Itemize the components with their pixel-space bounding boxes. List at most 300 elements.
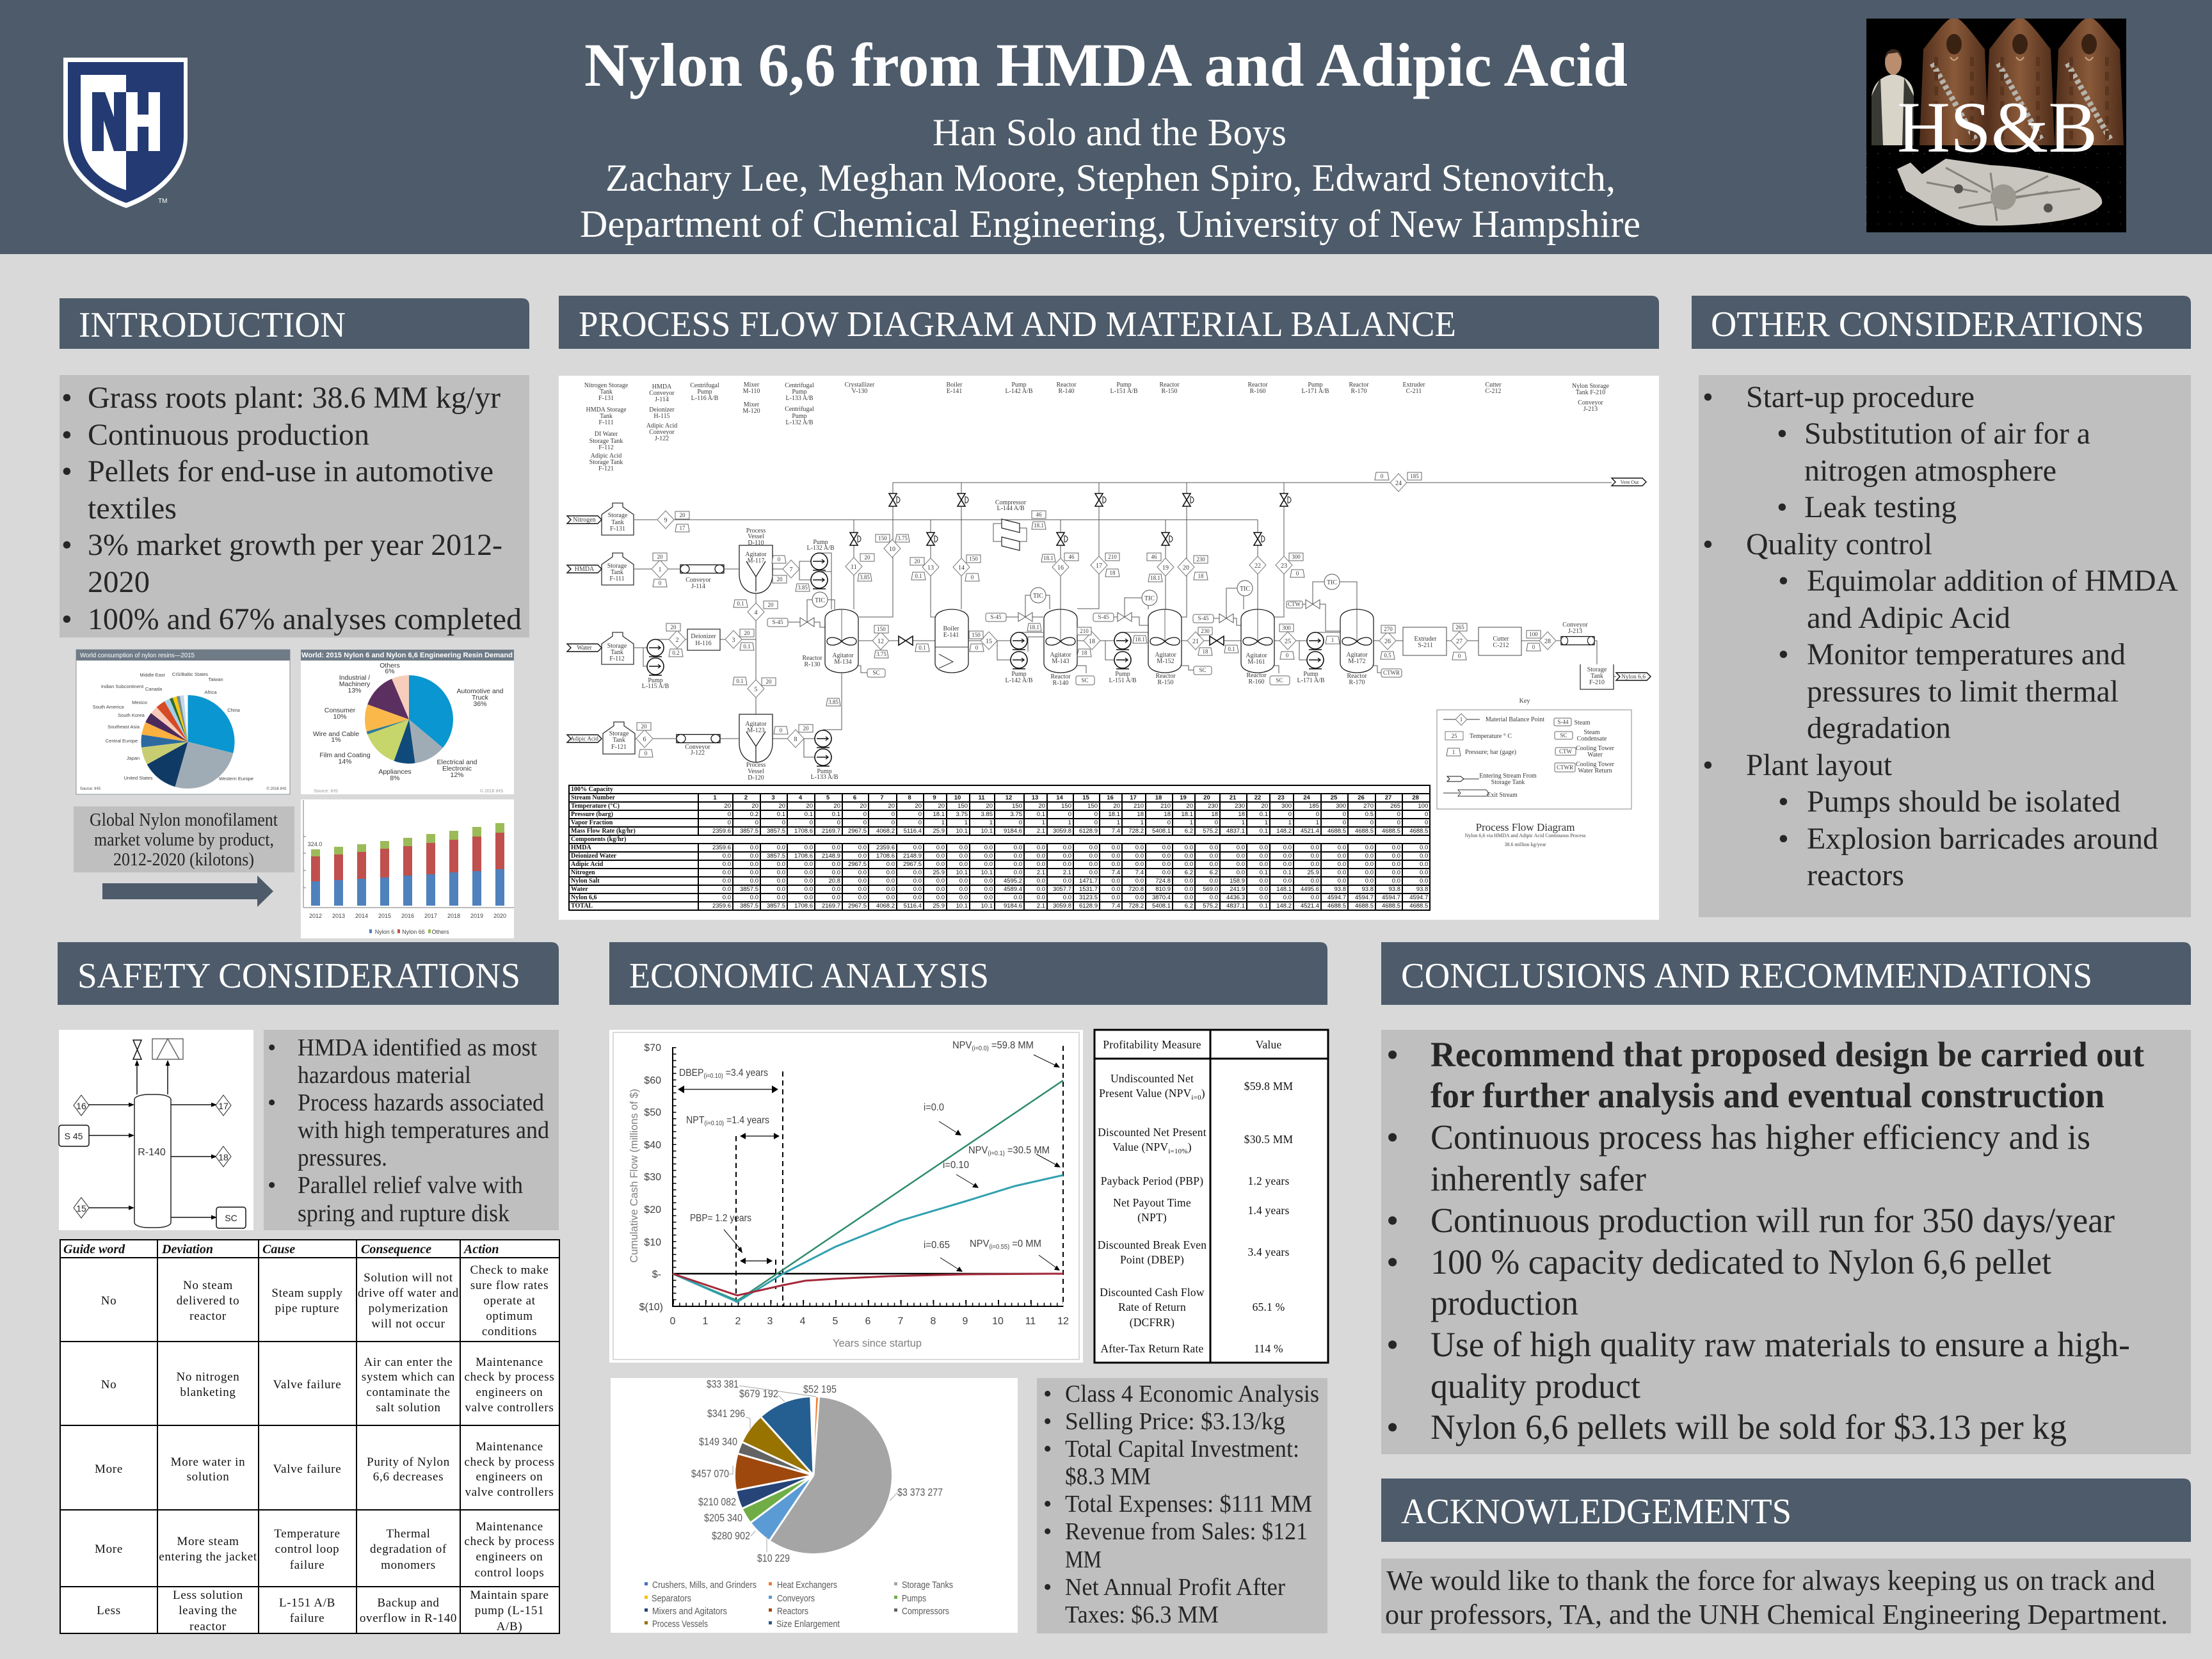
table: material balance stream table: 0.0 — [1135, 894, 1144, 901]
panel: other considerations bullets: Monitor temperatures and — [1807, 637, 2126, 671]
table: material balance stream table: 0.0 — [1283, 844, 1292, 851]
table: material balance stream table: 0.1 — [1283, 869, 1292, 876]
table: material balance stream table: 0.0 — [1135, 878, 1144, 885]
table: material balance stream table: 4595.2 — [1004, 878, 1022, 885]
storage tanks and inlets: Storage — [607, 563, 627, 570]
table: material balance stream table: 0.1 — [1260, 869, 1268, 876]
table: material balance stream table: 12 — [1006, 794, 1012, 801]
table: material balance stream table: 8 — [908, 794, 911, 801]
equipment labels: Conveyor — [649, 429, 675, 436]
table: material balance stream table: 0.0 — [1037, 894, 1045, 901]
arrow: to bar chart — [102, 876, 273, 907]
material balance diamonds: 13 — [927, 565, 934, 572]
table: material balance stream table: 10.1 — [981, 828, 993, 835]
panel: conclusions bullets: quality product — [1431, 1366, 1640, 1406]
chart: equipment cost pie: $10 229 — [757, 1552, 790, 1564]
table: material balance stream table: 0 — [892, 811, 895, 818]
diagram caption — [1464, 821, 1586, 847]
table: material balance stream table: 0.0 — [805, 878, 813, 885]
conveyors, deionizer, extruder and cutter: Conveyor — [1562, 621, 1588, 629]
team name: Han Solo and the Boys — [933, 111, 1286, 154]
panel: conclusions bullets: 100 % capacity dedicated to Nylon 6,6 pellet — [1431, 1242, 2051, 1281]
table: material balance stream table: 6128.9 — [1079, 828, 1098, 835]
table: material balance stream table: 0 — [1425, 819, 1428, 826]
process vessels and reactors: M-152 — [1157, 658, 1174, 665]
table: material balance stream table: 2.1 — [1037, 828, 1045, 835]
table: material balance stream table: 1708.6 — [876, 853, 895, 860]
table: material balance stream table: 0.0 — [1185, 886, 1193, 893]
key: Exit Stream — [1487, 792, 1518, 799]
table: material balance stream table: 0 — [1019, 819, 1022, 826]
equipment labels — [584, 381, 1610, 472]
table: HAZOP analysis: valve controllers — [465, 1401, 554, 1415]
table: material balance stream table: 25.9 — [1307, 869, 1319, 876]
table: material balance stream table: 0.0 — [1089, 844, 1098, 851]
material balance diamonds: 6 — [643, 736, 646, 743]
table: material balance stream table: 20 — [833, 803, 840, 810]
panel: economic bullets: • — [1043, 1518, 1052, 1545]
material balance diamonds — [636, 474, 1556, 748]
chart: cumulative cash flow: $20 — [644, 1205, 661, 1215]
chart: world consumption of nylon resins pie: South America — [93, 704, 124, 710]
table: material balance stream table: 3123.5 — [1079, 894, 1098, 901]
conveyors, deionizer, extruder and cutter: Extruder — [1415, 636, 1437, 643]
chart: cumulative cash flow: DBEP — [679, 1068, 707, 1078]
conveyors, deionizer, extruder and cutter: F-210 — [1589, 679, 1605, 686]
table: material balance stream table: 0.0 — [984, 861, 993, 868]
table: material balance stream table: 0.0 — [805, 844, 813, 851]
table: material balance stream table: 7.4 — [1112, 828, 1120, 835]
chart: equipment cost pie: Reactors — [777, 1606, 808, 1617]
panel: introduction bullets: Pellets for end-use in automotive — [88, 454, 493, 488]
equipment labels: L-142 A/B — [1005, 388, 1033, 395]
diagram: reactor R-140 relief: 16 — [76, 1101, 86, 1111]
table: material balance stream table: 0.0 — [750, 869, 758, 876]
table: material balance stream table: 0.0 — [777, 886, 785, 893]
material balance diamonds: 7 — [790, 566, 792, 573]
table: material balance stream table: 0.0 — [1185, 894, 1193, 901]
table: material balance stream table: TOTAL — [571, 902, 593, 910]
table: HAZOP analysis: Solution will not — [364, 1271, 453, 1285]
table: material balance stream table: 150 — [958, 803, 968, 810]
table: material balance stream table: 1708.6 — [794, 853, 813, 860]
chart: cumulative cash flow: (i=0.10) — [703, 1073, 723, 1080]
process vessels and reactors: Agitator — [1246, 652, 1267, 659]
table: material balance stream table: 1 — [713, 794, 717, 801]
table: material balance stream table: 0.0 — [723, 853, 731, 860]
panel: economic bullets: Selling Price: $3.13/kg — [1065, 1408, 1285, 1435]
heading: conclusions and recommendations — [1381, 942, 2191, 1005]
table: HAZOP analysis: L-151 A/B — [279, 1596, 335, 1610]
chart: equipment cost pie: $3 373 277 — [897, 1486, 943, 1498]
chart: equipment cost pie: Mixers and Agitators — [652, 1606, 727, 1617]
temperature tags: 270 — [1384, 626, 1393, 632]
table: material balance stream table: 17 — [1130, 794, 1137, 801]
table: HAZOP analysis: check by process — [465, 1535, 554, 1548]
panel: economic bullets: $8.3 MM — [1065, 1463, 1151, 1490]
material balance diamonds: 21 — [1192, 638, 1199, 645]
equipment labels: Mixer — [744, 381, 760, 389]
table: material balance stream table: 0.0 — [858, 886, 867, 893]
table: material balance stream table: 0.0 — [1420, 861, 1428, 868]
temperature tags: 20 — [803, 725, 809, 732]
chart: cumulative cash flow: $- — [652, 1269, 661, 1280]
table: material balance stream table: 0.0 — [984, 886, 993, 893]
temperature tags: 100 — [1529, 631, 1538, 637]
key: Condensate — [1577, 735, 1607, 742]
key: SC — [1560, 732, 1567, 739]
material balance diamonds: 16 — [1057, 565, 1064, 572]
chart: nylon engineering resin demand pie: Source: IHS — [314, 789, 338, 794]
table: material balance stream table: 0.0 — [959, 886, 968, 893]
table: material balance stream table: 0.0 — [1365, 878, 1374, 885]
heading: conclusions and recommendations: CONCLUSIONS AND RECOMMENDATIONS — [1401, 956, 2092, 996]
temperature controllers: TIC — [1033, 593, 1043, 600]
callout: global nylon monofilament caption: Global Nylon monofilament — [90, 810, 278, 830]
pumps and compressor: L-115 A/B — [642, 683, 669, 690]
table: material balance stream table: 2359.6 — [712, 902, 731, 910]
table: material balance stream table: 9 — [933, 794, 936, 801]
table: material balance stream table: 93.8 — [1416, 886, 1428, 893]
panel: economic bullets — [1037, 1378, 1327, 1633]
process vessels and reactors: Reactor — [1246, 672, 1267, 679]
table: material balance stream table: 20 — [1203, 794, 1210, 801]
panel: other considerations bullets: • — [1703, 380, 1713, 414]
table: material balance stream table: 18 — [1137, 811, 1144, 818]
equipment labels: Storage Tank — [589, 438, 623, 445]
callout: global nylon monofilament caption: market volume by product, — [94, 830, 274, 850]
table: material balance stream table: 3057.7 — [1053, 886, 1071, 893]
process vessels and reactors: Reactor — [802, 655, 822, 662]
table: material balance stream table: 0 — [1068, 811, 1071, 818]
table: material balance stream table: 4521.4 — [1301, 902, 1319, 910]
chart: nylon engineering resin demand pie: Wire and Cable — [313, 730, 359, 738]
equipment labels: Tank — [600, 389, 613, 396]
diagram caption: 38.6 million kg/year — [1504, 842, 1546, 847]
panel: economic bullets: MM — [1065, 1546, 1102, 1573]
panel: introduction bullets: • — [61, 381, 72, 415]
table: material balance stream table: 0.0 — [1063, 878, 1071, 885]
table: HAZOP analysis: sure flow rates — [470, 1279, 549, 1292]
table: material balance stream table: 2.1 — [1037, 902, 1045, 910]
table: material balance stream table: 21 — [1230, 794, 1236, 801]
table: material balance stream table: 0.0 — [1365, 853, 1374, 860]
table: HAZOP analysis: polymerization — [369, 1302, 448, 1315]
table: material balance stream table: 1531.7 — [1079, 886, 1098, 893]
temperature tags: 150 — [878, 535, 887, 541]
process vessels and reactors: R-160 — [1248, 678, 1265, 685]
panel: other considerations bullets: degradation — [1807, 711, 1951, 745]
table: material balance stream table: 0.0 — [1135, 853, 1144, 860]
table: material balance stream table: 4594.7 — [1327, 894, 1346, 901]
table: material balance stream table: 0 — [1215, 819, 1218, 826]
table: material balance stream table: 148.2 — [1276, 828, 1292, 835]
table: material balance stream table: 5 — [826, 794, 830, 801]
heading: process flow diagram: PROCESS FLOW DIAGRAM AND MATERIAL BALANCE — [579, 305, 1456, 344]
heading: introduction: INTRODUCTION — [79, 305, 346, 345]
conveyors, deionizer, extruder and cutter: Deionizer — [691, 633, 716, 640]
storage tanks and inlets: Water — [577, 645, 592, 652]
table: material balance stream table: 1 — [1042, 819, 1045, 826]
table: HAZOP analysis: More steam — [177, 1535, 239, 1548]
pumps and compressor: Pump — [1115, 671, 1130, 678]
table: material balance stream table: 20 — [778, 803, 785, 810]
equipment labels: Storage Tank — [589, 459, 623, 466]
chart: cumulative cash flow: 1 — [703, 1316, 709, 1327]
diagram: reactor R-140 relief — [59, 1030, 253, 1230]
panel: other considerations bullets: and Adipic Acid — [1807, 601, 2010, 635]
table: material balance stream table: 0.0 — [1162, 853, 1171, 860]
process vessels and reactors: R-140 — [1052, 680, 1069, 687]
panel: other considerations bullets: Leak testing — [1804, 490, 1957, 524]
table: material balance stream table: 0.1 — [832, 811, 840, 818]
panel: process flow diagram — [559, 376, 1659, 920]
table: material balance stream table: 16 — [1107, 794, 1114, 801]
table: material balance stream table: 0.0 — [750, 853, 758, 860]
table: HAZOP analysis: Maintenance — [476, 1440, 543, 1454]
table: material balance stream table: Nylon 6,6 — [571, 894, 597, 901]
table: material balance stream table: 0.0 — [1260, 894, 1268, 901]
table: material balance stream table: 0.0 — [913, 869, 922, 876]
table: material balance stream table: 0.0 — [913, 878, 922, 885]
chart: nylon engineering resin demand pie: 36% — [473, 700, 487, 708]
chart: nylon engineering resin demand pie: Consumer — [325, 707, 356, 714]
table: material balance stream table: 2169.7 — [822, 902, 840, 910]
chart: equipment cost pie: Pumps — [902, 1593, 926, 1604]
table: material balance stream table: 4688.5 — [1355, 828, 1374, 835]
table: HAZOP analysis — [60, 1240, 559, 1633]
chart: cumulative cash flow: i=0.65 — [924, 1240, 950, 1251]
header band — [0, 0, 2212, 254]
pressure tags: 18 — [1082, 650, 1087, 656]
table: material balance stream table: 18 — [1238, 811, 1245, 818]
table: material balance stream table: 0.0 — [1185, 853, 1193, 860]
chart: nylon engineering resin demand pie: 1% — [331, 736, 341, 744]
table: material balance stream table: 0 — [1425, 811, 1428, 818]
table: material balance stream table: 0.0 — [1210, 878, 1218, 885]
table: material balance stream table: 0.0 — [1338, 861, 1346, 868]
equipment labels: Reactor — [1247, 381, 1268, 389]
table: material balance stream table: 28 — [1412, 794, 1419, 801]
conveyors, deionizer, extruder and cutter: Nylon 6,6 — [1621, 674, 1646, 680]
table: material balance stream table: 18 — [1164, 811, 1171, 818]
table: material balance stream table: 20 — [888, 803, 895, 810]
table: HAZOP analysis: More — [95, 1463, 123, 1476]
table: material balance stream table: 1 — [1117, 819, 1120, 826]
table: material balance stream table: 0.0 — [936, 878, 945, 885]
heading: acknowledgements: ACKNOWLEDGEMENTS — [1401, 1492, 1791, 1532]
panel: other considerations bullets: nitrogen atmosphere — [1804, 454, 2056, 488]
key: 1 — [1460, 716, 1463, 723]
chart: cumulative cash flow: $30 — [644, 1172, 661, 1183]
table: profitability measures: Payback Period (PBP) — [1101, 1174, 1203, 1187]
table: material balance stream table: 100 — [1418, 803, 1428, 810]
table: material balance stream table: 728.2 — [1128, 902, 1144, 910]
table: material balance stream table: 7 — [880, 794, 884, 801]
pumps and compressor: Pump — [1303, 671, 1318, 678]
panel: conclusions bullets: Recommend that proposed design be carried out — [1431, 1035, 2145, 1074]
table: HAZOP analysis: Less — [97, 1604, 121, 1617]
key: Entering Stream From — [1479, 773, 1537, 780]
table: profitability measures: i=10% — [1168, 1148, 1188, 1155]
chart: cumulative cash flow: Years since startup — [833, 1337, 922, 1349]
table: material balance stream table: Nitrogen — [571, 869, 595, 876]
equipment labels: Boiler — [946, 381, 963, 389]
equipment labels: Mixer — [744, 401, 760, 408]
table: material balance stream table: 0.0 — [858, 894, 867, 901]
chart: cumulative cash flow: (i=0.0) — [972, 1045, 989, 1052]
chart: nylon engineering resin demand pie: Truck — [472, 694, 489, 701]
table: HAZOP analysis: Air can enter the — [364, 1356, 453, 1369]
table: material balance stream table: 3857.5 — [740, 902, 758, 910]
table: material balance stream table: Pressure (barg) — [571, 811, 613, 818]
utility tags: S-45 — [990, 614, 1002, 620]
table: material balance stream table: 0 — [918, 811, 922, 818]
table: material balance stream table: 4688.5 — [1382, 828, 1400, 835]
table: material balance stream table: 0.0 — [832, 886, 840, 893]
table: material balance stream table: 0.0 — [1392, 869, 1400, 876]
table: HAZOP analysis: No — [101, 1294, 116, 1308]
table: material balance stream table: 0.0 — [1210, 861, 1218, 868]
panel: safety bullets: Parallel relief valve with — [298, 1172, 523, 1199]
table: material balance stream table: 0.0 — [959, 853, 968, 860]
conveyors, deionizer, extruder and cutter: Conveyor — [685, 744, 710, 751]
equipment labels: Nylon Storage — [1572, 383, 1610, 390]
table: material balance stream table: 20 — [806, 803, 813, 810]
chart: cumulative cash flow: i=0.0 — [924, 1102, 944, 1113]
pumps and compressor — [642, 499, 1325, 781]
table: material balance stream table: 4521.4 — [1301, 828, 1319, 835]
panel: acknowledgements text: our professors, TA, and the UNH Chemical Engineering Department. — [1385, 1599, 2168, 1630]
chart: nylon engineering resin demand pie: © 2016 IHS — [480, 789, 503, 794]
process vessels and reactors: Reactor — [1050, 673, 1071, 680]
material balance diamonds: 4 — [754, 609, 758, 616]
diagram: reactor R-140 relief: R-140 — [138, 1147, 166, 1158]
table: material balance stream table: 158.9 — [1230, 878, 1245, 885]
pressure tags: 0.1 — [1228, 646, 1235, 652]
table: HAZOP analysis: operate at — [483, 1294, 536, 1308]
table: material balance stream table: 0.0 — [1014, 869, 1022, 876]
authors: Zachary Lee, Meghan Moore, Stephen Spiro, Edward Stenovitch, — [605, 157, 1615, 199]
table: material balance stream table: 7.4 — [1112, 869, 1120, 876]
chart: nylon engineering resin demand pie: 6% — [385, 668, 395, 675]
panel: other considerations bullets: Equimolar addition of HMDA — [1807, 564, 2178, 598]
table: material balance stream table: 22 — [1254, 794, 1261, 801]
table: material balance stream table: 0.0 — [959, 894, 968, 901]
table: material balance stream table: 0 — [728, 811, 731, 818]
table: material balance stream table: 0.0 — [1365, 869, 1374, 876]
table: material balance stream table: 1708.6 — [794, 828, 813, 835]
process vessels and reactors: M-117 — [748, 557, 764, 565]
table: HAZOP analysis: overflow in R-140 — [360, 1612, 457, 1625]
temperature controllers: TIC — [1240, 586, 1250, 593]
table: material balance stream table: 148.1 — [1276, 886, 1292, 893]
table: HAZOP analysis: optimum — [486, 1310, 533, 1323]
diagram caption: Nylon 6,6 via HMDA and Adipic Acid Continuous Process — [1464, 833, 1586, 838]
chart: nylon engineering resin demand pie: Electronic — [442, 765, 472, 773]
table: HAZOP analysis: Deviation — [161, 1242, 213, 1256]
table: material balance stream table: 0.0 — [1283, 853, 1292, 860]
panel: conclusions bullets: • — [1386, 1242, 1399, 1281]
key: Cooling Tower — [1576, 745, 1615, 752]
table: material balance stream table: 0.0 — [858, 844, 867, 851]
table: material balance stream table: 0.0 — [1112, 886, 1120, 893]
table: material balance stream table: 0 — [1167, 819, 1171, 826]
conveyors, deionizer, extruder and cutter — [677, 478, 1651, 757]
table: HAZOP analysis: Maintain spare — [470, 1589, 549, 1602]
equipment labels: Tank F-210 — [1576, 389, 1605, 396]
panel: safety bullets: • — [268, 1034, 276, 1061]
chart: cumulative cash flow: 3 — [767, 1316, 773, 1327]
table: material balance stream table: 0.0 — [886, 861, 895, 868]
utility tags: S-45 — [1198, 615, 1209, 621]
chart: world consumption of nylon resins pie: World consumption of nylon resins—2015 — [80, 652, 195, 659]
table: material balance stream table: 4688.5 — [1409, 828, 1428, 835]
table: material balance stream table: 810.9 — [1155, 886, 1171, 893]
table: HAZOP analysis: valve controllers — [465, 1486, 554, 1499]
pressure tags: 0 — [975, 645, 979, 651]
chart: cumulative cash flow: $10 — [644, 1237, 661, 1248]
panel: other considerations bullets: • — [1778, 564, 1789, 598]
table: material balance stream table: 0.0 — [1063, 853, 1071, 860]
table: material balance stream table: 0.0 — [832, 861, 840, 868]
process vessels and reactors: Agitator — [745, 721, 767, 728]
table: material balance stream table: 2 — [744, 794, 748, 801]
table: material balance stream table: 0.0 — [1185, 878, 1193, 885]
table: HAZOP analysis: Thermal — [386, 1527, 431, 1541]
chart: nylon monofilament market volume bars: 2014 — [355, 913, 368, 919]
chart: cumulative cash flow: NPV — [968, 1145, 990, 1156]
material balance diamonds: 27 — [1456, 638, 1463, 645]
panel: safety bullets: • — [268, 1089, 276, 1116]
table: material balance stream table: 25.9 — [933, 902, 945, 910]
process pipes — [634, 483, 1616, 757]
table: material balance stream table: 0.0 — [805, 886, 813, 893]
equipment labels: H-115 — [653, 413, 670, 420]
equipment labels: J-213 — [1583, 406, 1598, 413]
table: material balance stream table: 10.1 — [981, 869, 993, 876]
table: material balance stream table: 185 — [1309, 803, 1319, 810]
table: material balance stream table: 0.0 — [1365, 861, 1374, 868]
table: material balance stream table: 27 — [1385, 794, 1391, 801]
table: HAZOP analysis: Less solution — [173, 1589, 243, 1602]
table: material balance stream table: 5116.4 — [904, 828, 922, 835]
table: material balance stream table: 0.0 — [1311, 853, 1319, 860]
table: material balance stream table: 2967.5 — [848, 902, 867, 910]
table: material balance stream table: 0.0 — [936, 886, 945, 893]
panel: conclusions bullets: Continuous production will run for 350 days/year — [1431, 1201, 2115, 1240]
panel: conclusions bullets: Use of high quality raw materials to ensure a high- — [1431, 1325, 2130, 1364]
table: HAZOP analysis: system which can — [362, 1370, 455, 1384]
chart: cumulative cash flow: 4 — [800, 1316, 806, 1327]
panel: conclusions bullets: • — [1386, 1325, 1399, 1364]
pumps and compressor: Pump — [817, 768, 832, 775]
table: material balance stream table: 20 — [1186, 803, 1193, 810]
table: material balance stream table: 0.0 — [886, 869, 895, 876]
diagram: reactor R-140 relief: SC — [225, 1213, 237, 1223]
storage tanks and inlets: F-121 — [611, 744, 627, 751]
table: material balance stream table: 0.0 — [959, 844, 968, 851]
material balance diamonds: 15 — [986, 638, 992, 645]
temperature controllers: TIC — [815, 597, 825, 604]
process vessels and reactors: Agitator — [1155, 652, 1176, 659]
table: HAZOP analysis: 6,6 decreases — [373, 1470, 444, 1484]
table: HAZOP analysis: drive off water and — [358, 1286, 459, 1300]
table: material balance stream table: 0 — [837, 819, 840, 826]
table: material balance stream table: 0.0 — [858, 869, 867, 876]
pressure tags: 3.85 — [828, 699, 838, 705]
panel: conclusions bullets: for further analysis and eventual construction — [1431, 1076, 2104, 1115]
